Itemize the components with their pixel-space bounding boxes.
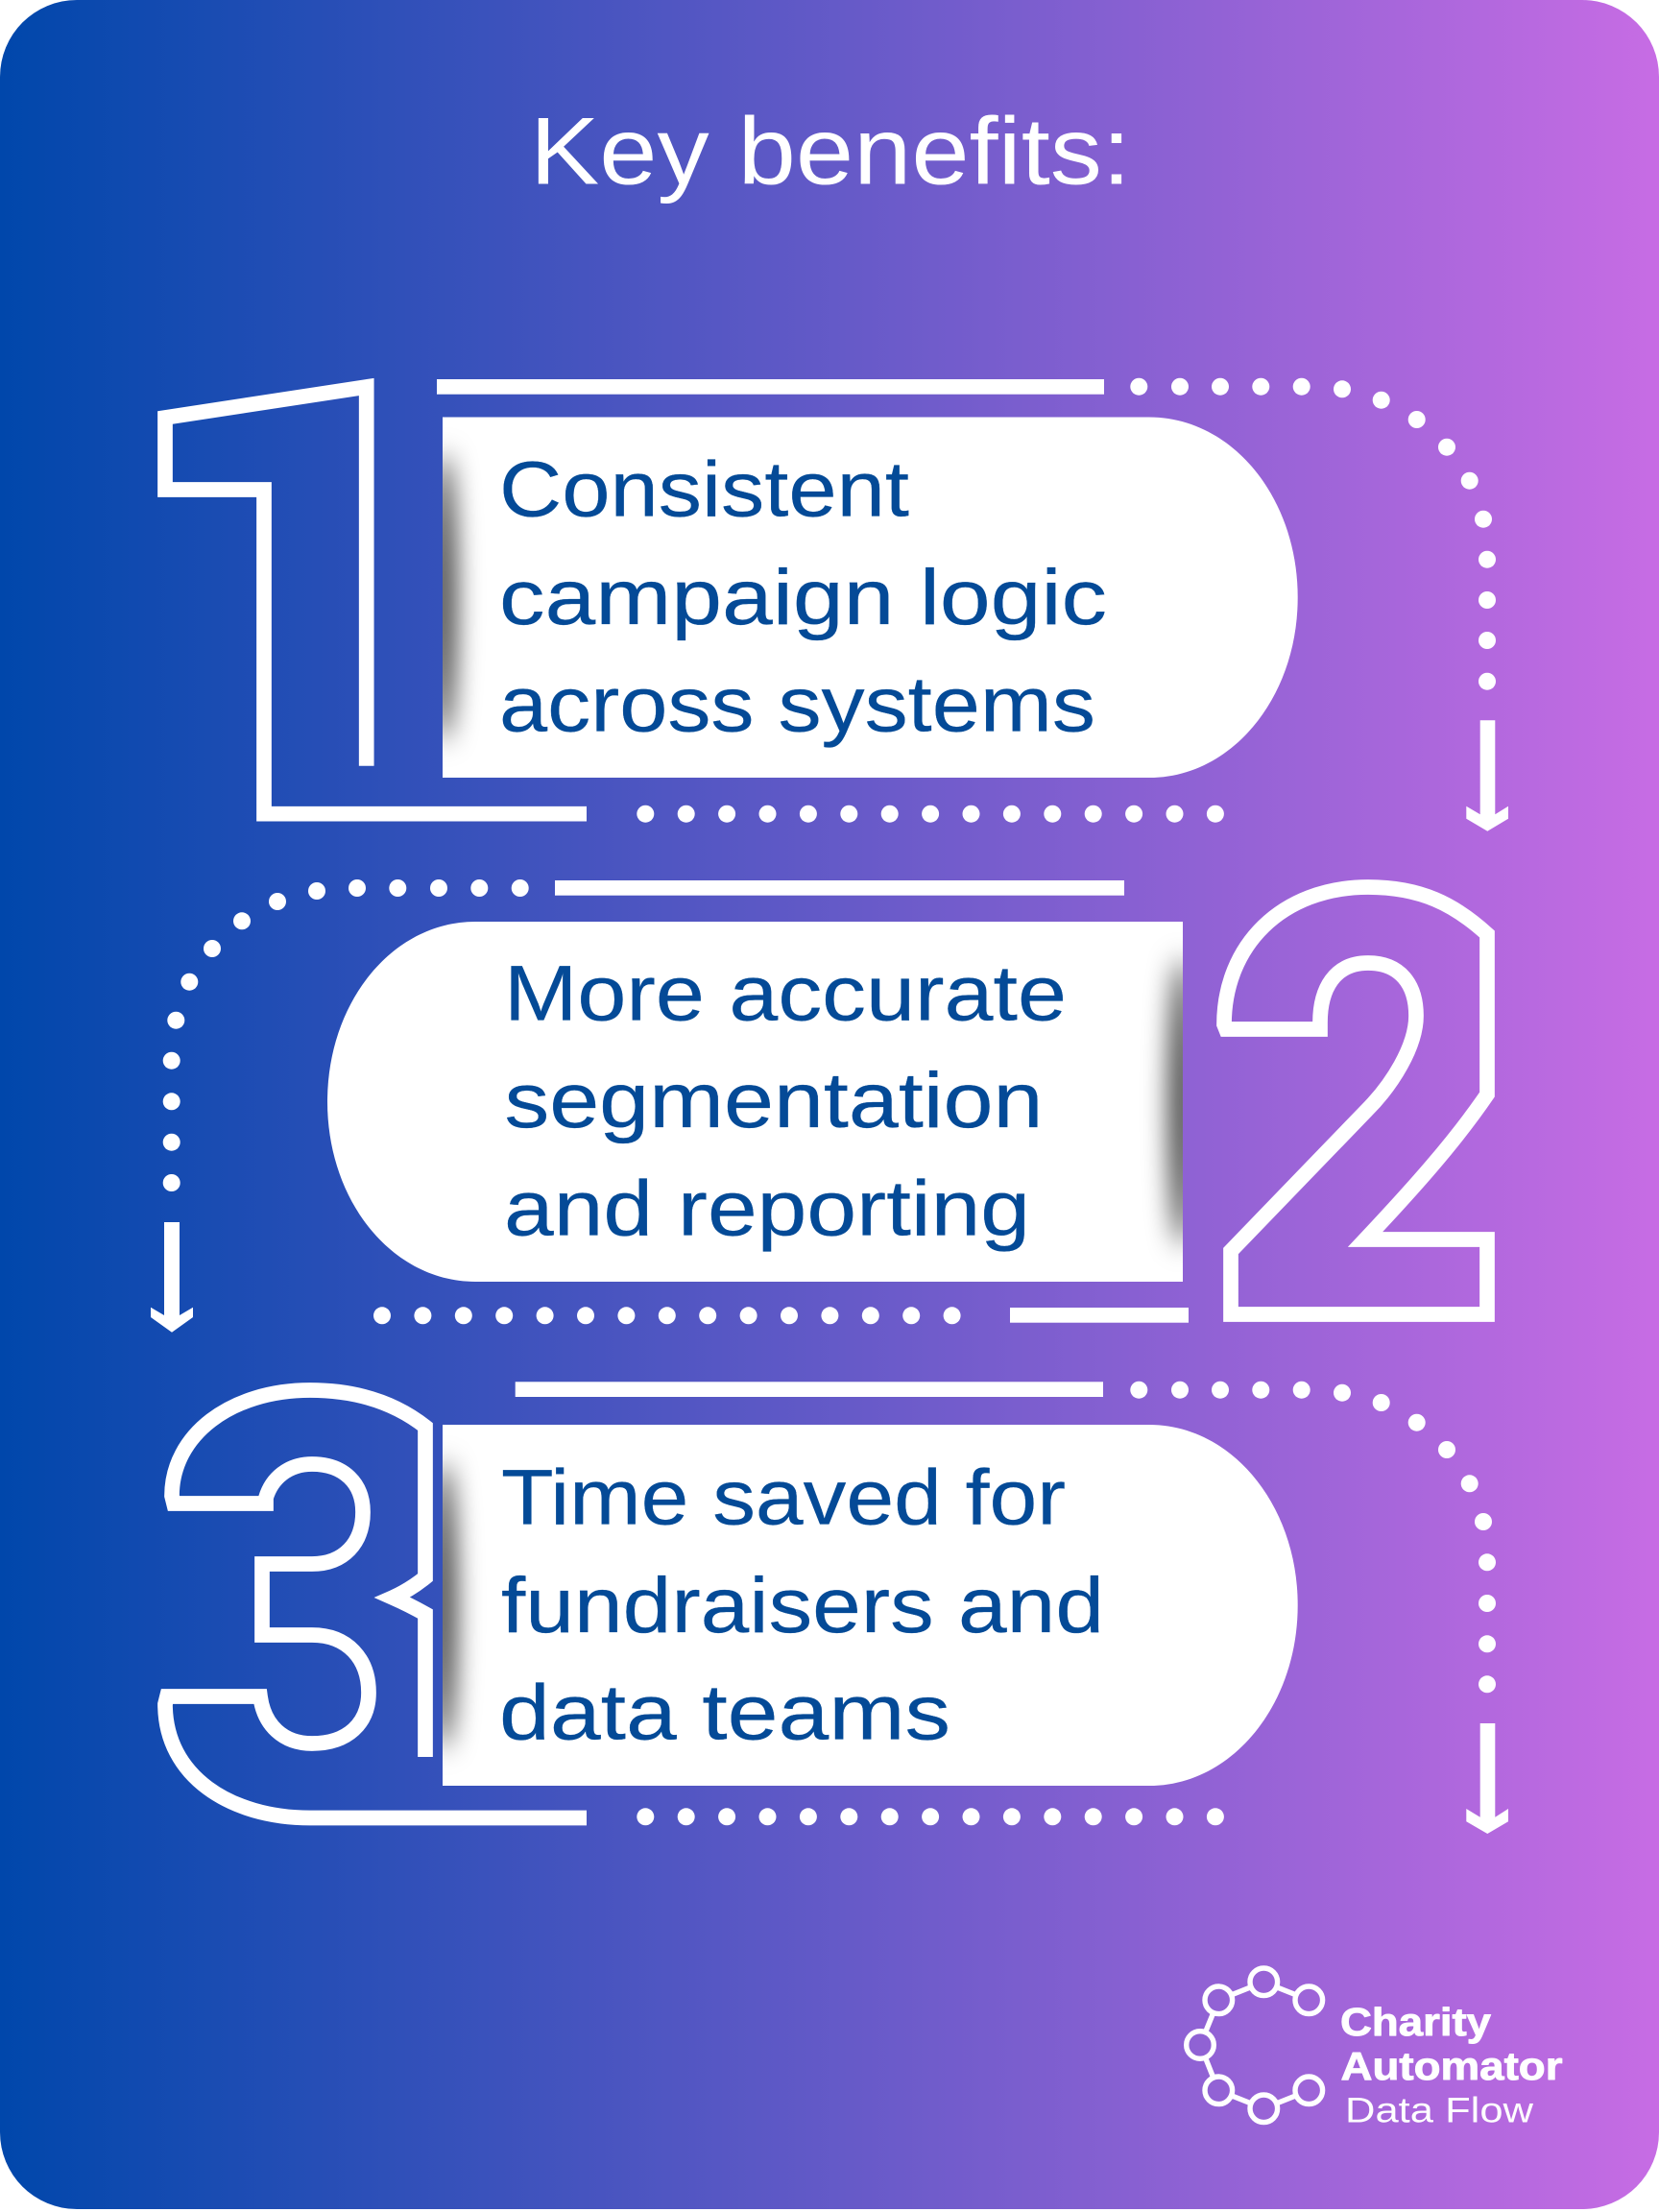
- logo name: Charity: Charity: [1340, 2000, 1491, 2044]
- top rule 1: [437, 379, 1104, 395]
- white text box 2: [327, 922, 1183, 1282]
- dotted connector 3 with curve: [1130, 1382, 1496, 1693]
- bottom dotted row 3: [637, 1808, 1224, 1825]
- panel: benefit 3: [165, 1382, 1508, 1834]
- benefit 3 text: fundraisers and: [501, 1562, 1104, 1649]
- benefit 3 text: Time saved for: [501, 1455, 1066, 1542]
- benefit 3 text: data teams: [499, 1670, 950, 1757]
- bottom dotted row 1: [637, 805, 1224, 823]
- numeral 1 outline: [165, 387, 587, 814]
- benefit 2 text: and reporting: [504, 1166, 1030, 1253]
- benefit 3 text: [499, 1455, 1104, 1757]
- logo tagline: Data Flow: Data Flow: [1345, 2091, 1533, 2130]
- icon: ring of connected nodes: [1187, 1968, 1323, 2123]
- benefit 2 text: More accurate: [504, 950, 1067, 1038]
- dotted connector 2 with curve: [163, 879, 529, 1191]
- benefit 1 text: across systems: [499, 661, 1095, 749]
- bottom rule 2: [1010, 1308, 1189, 1323]
- benefit 1 text: [499, 446, 1107, 749]
- white text box 3: [443, 1425, 1298, 1786]
- top rule 2: [555, 880, 1124, 896]
- logo: Charity Automator Data Flow: [1187, 1968, 1563, 2130]
- box 3 shadow: [431, 1461, 454, 1749]
- arrow 2: [151, 1222, 193, 1333]
- logo name: Automator: Automator: [1340, 2044, 1563, 2088]
- top rule 3: [516, 1382, 1103, 1397]
- panel: benefit 1: [165, 378, 1508, 831]
- title: Key benefits:: [530, 98, 1131, 204]
- arrow 1: [1466, 720, 1508, 831]
- numeral 3 outline: [165, 1390, 587, 1818]
- numeral 2 outline: [1224, 887, 1487, 1314]
- white text box 1: [443, 417, 1298, 778]
- benefit 1 text: Consistent: [499, 446, 909, 534]
- box 1 shadow: [431, 453, 454, 741]
- benefit 2 text: segmentation: [505, 1057, 1043, 1144]
- dotted connector 1 with curve: [1130, 378, 1496, 690]
- arrow 3: [1466, 1723, 1508, 1834]
- benefit 2 text: [504, 950, 1067, 1253]
- benefit 1 text: campaign logic: [499, 554, 1107, 641]
- panel: benefit 2: [151, 879, 1487, 1333]
- box 2 shadow: [1171, 958, 1194, 1246]
- bottom dotted row 2: [373, 1307, 961, 1324]
